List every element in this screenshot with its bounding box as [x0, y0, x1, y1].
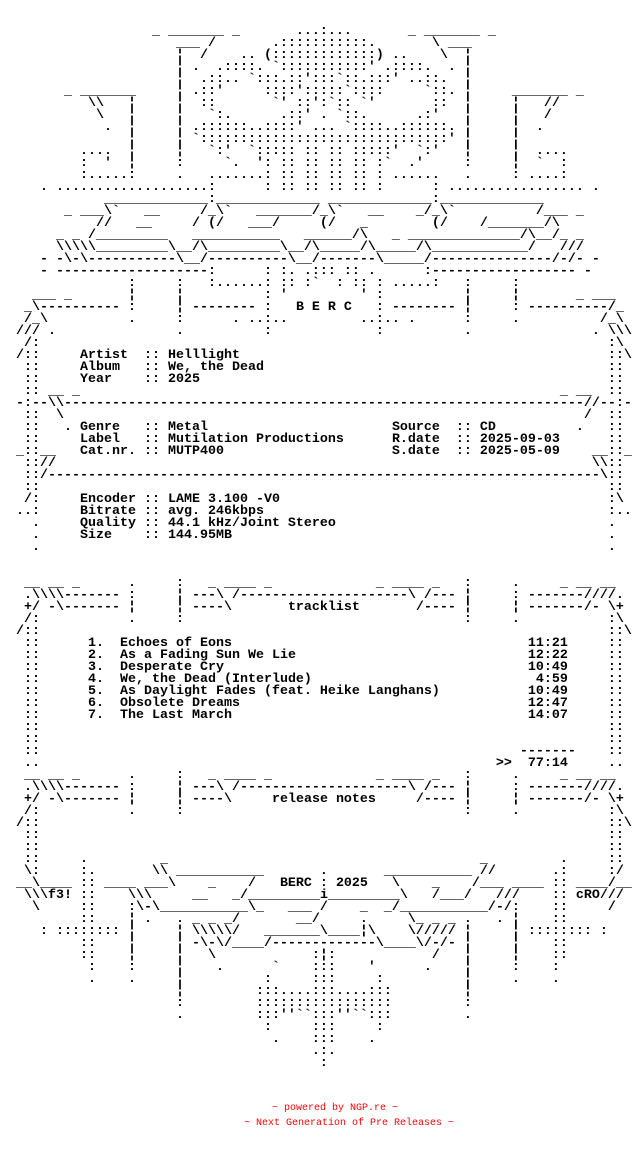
footer credit: next generation: ~ Next Generation of Pre Releases ~	[244, 1118, 454, 1129]
heading: tracklist: __ __ _ . : _ ____ _ _ ____ _ : . _ __ __ .\\\\------- : ¦ ---\ /---------------------\ /--- ¦ : -------////. +/ -\------- ¦ ¦ ----\ tracklist /---- ¦ ¦ -------/- \+ /: . : : . :\ /:: ::\	[0, 576, 632, 639]
footer art: BERC 2025 logo and emblem: :: :: :: :: :: . _ _ . :: \: :. \\ ___________ . ___________ // .: :/ __\____ :: ____ ___\ _ / BERC : 2025 \ _ /___ ____ :: ____/__ \\\f3! :: \\\ __ _/_________i_________\ /___/ /// :: cRO/// \ :: :\-\___________\_ ___ / _ _/___________/-/: :: / :: ¦ . . _ _ _/ __/ . \_ _ _ . . ¦ :: : :::::::: ¦ ¦ \\\\\/ _______\____¦\ \///// ¦ ¦ :::::::: : :: ¦ ¦ -\-\/____/-------------\____\/-/- ¦ ¦ :: :: ¦ ¦ \ :¦: / ¦ ¦ :: : : ¦ . ` ::: ' . ¦ : : . . ¦ : ::: : ¦ . . ¦ :::....:::....::: ¦ : ::::::::::::::::: : . :::''``:::''``::: . : ::: : . ::: . .:. :	[0, 828, 632, 1071]
footer credit: powered by: ~ powered by NGP.re ~	[272, 1103, 398, 1114]
panel: track list: :: 1. Echoes of Eons 11:21 :: :: 2. As a Fading Sun We Lie 12:22 :: :: 3. Desperate Cry 10:49 :: :: 4. We, the Dead (Interlude) 4:59 :: :: 5. As Daylight Fades (feat. Heike Langhans) 10:49 :: :: 6. Obsolete Dreams 12:47 :: :: 7. The Last March 14:07 :: :: :: :: :: :: ------- :: .. >> 77:14 ..	[0, 636, 624, 771]
panel: release info: /: :\ /:: Artist :: Helllight ::\ :: Album :: We, the Dead :: :: Year :: 2025 :: :: __ _ _ __ :: -:--\\-----------------------------------------------------------------//--:- :: \ / :: :: . Genre :: Metal Source :: CD . :: :: Label :: Mutilation Productions R.date :: 2025-09-03 :: _::__ Cat.nr. :: MUTP400 S.date :: 2025-05-09 __::_ ::// \\:: ::/---------------------------------------------------------------------\:: :: :: /: Encoder :: LAME 3.100 -V0 :\ ..: Bitrate :: avg. 246kbps :.. . Quality :: 44.1 kHz/Joint Stereo . . Size :: 144.95MB . . .	[0, 336, 632, 555]
heading: release notes: __ __ _ . : _ ____ _ _ ____ _ : . _ __ __ .\\\\------- : ¦ ---\ /---------------------\ /--- ¦ : -------////. +/ -\------- ¦ ¦ ----\ release notes /---- ¦ ¦ -------/- \+ /: . : : . :\ /:: ::\	[0, 768, 632, 831]
banner: B E R C: ___ _ ¦ ¦ : ' ' : ¦ ¦ _ ___ _\---------- : ¦ -------- : B E R C : -------- ¦ : ----------/_ /_\ . : . ..:.. ..:.. . : . /_\ /// . . : : . . \\\	[0, 288, 632, 339]
header art: skull and frames: _ _______ _ ...:... _ _______ _ ___ / .:::::::::::. \ ___ ¦ / .. (:::::::::::::) .. \ ¦ ¦ . .::::. `:::::::::::' .::::. . ¦ ¦ .::.. `:::.::':::`::.:::' ..::. ¦ _ _______ ¦ .::' ::::':::::`:::: `::. ¦ _______ _ \\ ¦ ¦ :: `' ::':`:: `' :: ¦ ¦ // \ ¦ ¦ `:. .::' . `::. .:' ¦ ¦ / . ¦ ¦ .::::::..::::' ... `::::..::::::. ¦ ¦ . ¦ ¦ `:::::::::::::::::::::::::::::::' ¦ ¦ .... ¦ ¦ `:' `::::: :: :: :::::' `:' ¦ ¦ .... : ' ¦ : `. ': :: :: :: :: :` .' : ¦ ` : :.....: . .......: :: :: :: :: : ...... . : ....: . ...................: : :: :: :: :: : : ................. . _____________:_____________ _____________:_____________ _ ___\` __ /_\` _______/_\` __ _/_\` /___ _ // __ / (/ ___/ (/ _ (/ /_______/\ _ _ /_________ ___________ ______/\ _ ______________/\__/_ _ \\\\\_________\__/\_________\__/\_____/\_____/\____________/ /// - -\-\-----------\__/----------\__/-------\_____/---------------/-/- - - -------------------: : :. .::: :: . :------------------ - : : :......: :: :` : :: : .....: : :	[0, 24, 600, 291]
